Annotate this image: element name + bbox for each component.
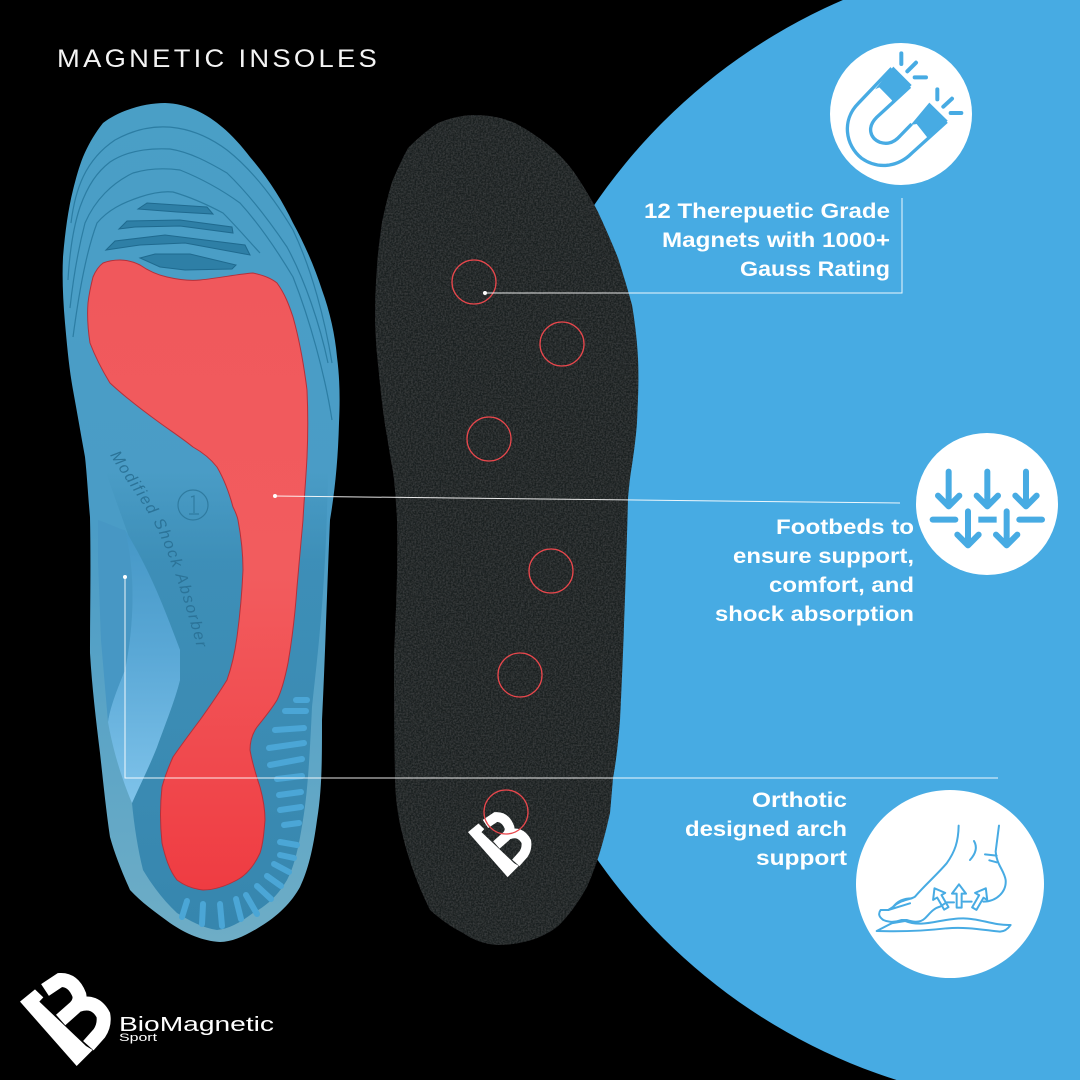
forefoot grooves — [68, 127, 332, 420]
forefoot slots — [106, 203, 250, 270]
leader line: magnets — [483, 198, 902, 295]
arch shadow — [98, 520, 132, 722]
caption: magnets — [644, 200, 890, 281]
caption: magnets: 12 Therepuetic Grade — [644, 200, 890, 223]
brand tagline: Sport — [119, 1032, 157, 1044]
arch support highlight — [108, 530, 180, 803]
brand name: BioMagnetic — [119, 1014, 274, 1036]
caption: footbeds — [715, 516, 914, 626]
blue circle panel — [494, 0, 1080, 1080]
heel ribs — [182, 700, 307, 926]
logo on insole — [468, 817, 527, 877]
caption: magnets: Gauss Rating — [740, 258, 890, 281]
caption: footbeds: shock absorption — [715, 603, 914, 626]
caption: footbeds: comfort, and — [769, 574, 914, 597]
heel cup — [105, 470, 328, 930]
caption: arch support: support — [756, 847, 847, 870]
embossed label: Modified Shock Absorber — [110, 452, 206, 646]
caption: arch support: Orthotic — [752, 789, 847, 812]
size mark — [178, 490, 208, 520]
caption: footbeds: Footbeds to — [776, 516, 914, 539]
title: MAGNETIC INSOLES — [57, 45, 380, 73]
right insole: black magnetic sole — [375, 115, 638, 945]
leader line: arch — [123, 575, 998, 778]
left insole: blue footbed — [62, 103, 340, 942]
icon: foot with arch support — [856, 790, 1044, 978]
caption: footbeds: ensure support, — [733, 545, 914, 568]
icon: impact arrows — [916, 433, 1058, 575]
caption: magnets: Magnets with 1000+ — [662, 229, 890, 252]
magnet location markers — [452, 260, 584, 834]
logo mark — [20, 980, 104, 1066]
leader line: footbed — [273, 494, 900, 503]
brand logo — [20, 980, 274, 1066]
icon: magnet — [830, 43, 972, 185]
red gel pad — [88, 260, 308, 890]
caption: arch support — [685, 789, 847, 870]
caption: arch support: designed arch — [685, 818, 847, 841]
